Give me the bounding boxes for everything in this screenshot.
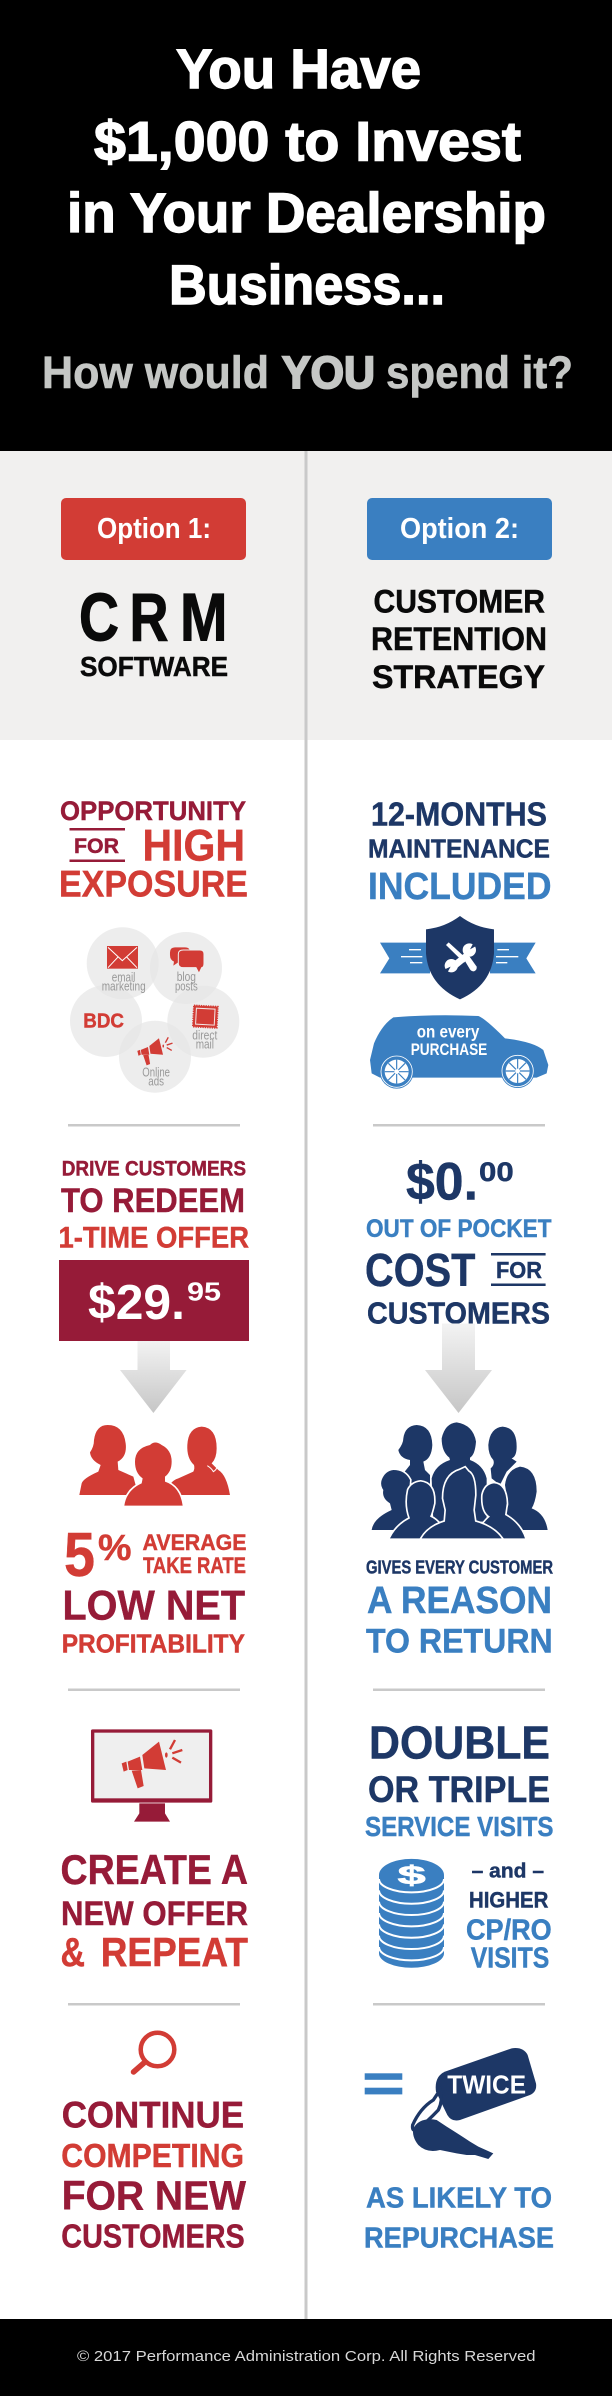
heading: continue competing for new customers: FOR NEW [62, 2173, 246, 2219]
CRM software title: R [130, 580, 168, 656]
heading: double or triple service visits [365, 1716, 554, 1842]
heading: opportunity for high exposure [59, 796, 248, 905]
heading: zero dollars out of pocket: OUT OF POCKET [366, 1215, 552, 1243]
label: on every purchase: PURCHASE [411, 1040, 487, 1059]
heading: gives every customer a reason to return: GIVES EVERY CUSTOMER [366, 1558, 553, 1578]
heading: create a new offer and repeat: & [60, 1929, 85, 1975]
heading: as likely to repurchase: AS LIKELY TO [366, 2182, 552, 2214]
icon: three customers [79, 1425, 230, 1506]
heading: drive customers to redeem: DRIVE CUSTOMERS [62, 1158, 246, 1180]
heading: zero dollars out of pocket [365, 1152, 552, 1330]
heading: double or triple service visits: DOUBLE [369, 1716, 550, 1768]
panel: option 1 exposure [59, 796, 248, 1093]
label: direct mail: direct [192, 1028, 218, 1042]
price box: 95 [187, 1276, 221, 1306]
label: online ads: ads [148, 1075, 164, 1089]
CRM software title: C [79, 580, 119, 656]
CRM software title: M [180, 580, 228, 656]
stat: 5 percent average take rate [64, 1521, 246, 1590]
center column divider [304, 451, 308, 2319]
divider row 3 [68, 2003, 545, 2006]
marketing channel circles [70, 927, 239, 1093]
heading: opportunity for high exposure: FOR [74, 835, 119, 858]
label: direct mail: mail [196, 1038, 214, 1052]
icon: speech bubbles [170, 947, 204, 973]
heading: as likely to repurchase: REPURCHASE [364, 2223, 554, 2255]
label: direct mail [192, 1028, 218, 1052]
heading: zero dollars out of pocket: COST [365, 1244, 475, 1296]
text: and higher CP/RO visits: CP/RO [466, 1914, 552, 1946]
label: email marketing [102, 971, 146, 994]
stat: 5 percent average take rate: 5 [64, 1521, 95, 1590]
divider row 2 [68, 1688, 545, 1691]
subtitle: How would [42, 347, 269, 398]
panel: option 2 repurchase [364, 2048, 554, 2255]
subtitle: spend it? [386, 347, 573, 398]
title [67, 37, 546, 316]
arrow: down [120, 1341, 187, 1413]
heading: low net profitability [62, 1581, 245, 1659]
stat: 5 percent average take rate: AVERAGE [142, 1530, 246, 1555]
label: twice: TWICE [447, 2071, 526, 2099]
label: blog posts: blog [177, 970, 196, 984]
heading: create a new offer and repeat: REPEAT [101, 1929, 248, 1975]
heading: gives every customer a reason to return: A REASON [367, 1580, 552, 1622]
heading: low net profitability: LOW NET [62, 1581, 245, 1628]
heading: create a new offer and repeat [60, 1846, 248, 1975]
label: online ads: Online [142, 1066, 170, 1080]
heading: drive customers to redeem [58, 1158, 249, 1255]
heading: opportunity for high exposure: HIGH [142, 822, 245, 871]
panel: option 1 header [61, 498, 246, 682]
icon: shield with tools [380, 916, 536, 999]
heading: create a new offer and repeat: NEW OFFER [61, 1895, 248, 1933]
heading: 12-months maintenance included: INCLUDED [368, 866, 552, 908]
heading: opportunity for high exposure: EXPOSURE [59, 864, 248, 905]
icon: magnifying glass [134, 2033, 174, 2072]
label: blog posts [175, 970, 198, 994]
text: and higher CP/RO visits: VISITS [471, 1942, 549, 1974]
heading: as likely to repurchase [364, 2182, 554, 2255]
panel: option 1 repeat [60, 1729, 248, 1975]
heading: continue competing for new customers: CONTINUE [62, 2094, 244, 2136]
option header band [0, 451, 612, 740]
panel: option 2 service visits [365, 1716, 554, 1974]
heading: double or triple service visits: SERVICE VISITS [365, 1811, 554, 1842]
icon: coin stack [379, 1859, 444, 1968]
customer retention strategy title: STRATEGY [372, 659, 545, 695]
panel: option 2 maintenance [368, 796, 552, 1089]
customer retention strategy title: CUSTOMER [374, 584, 545, 620]
heading: create a new offer and repeat: CREATE A [60, 1846, 248, 1893]
heading: opportunity for high exposure: OPPORTUNITY [60, 796, 246, 826]
icon: crowd of customers [372, 1422, 548, 1538]
subtitle: YOU [282, 347, 375, 398]
heading: zero dollars out of pocket: $0. [406, 1152, 478, 1212]
stat: 5 percent average take rate: TAKE RATE [143, 1553, 246, 1578]
heading: gives every customer a reason to return: TO RETURN [366, 1623, 553, 1661]
label: on every purchase [411, 1021, 487, 1059]
heading: continue competing for new customers: CUSTOMERS [61, 2218, 245, 2255]
footer [0, 2319, 612, 2396]
heading: continue competing for new customers: COMPETING [61, 2137, 244, 2174]
heading: drive customers to redeem: TO REDEEM [61, 1182, 245, 1220]
option 2 badge: Option 2: [400, 513, 519, 545]
heading: continue competing for new customers [61, 2094, 246, 2255]
icon: equals sign [365, 2073, 402, 2094]
header banner [0, 0, 612, 451]
icon: envelope [107, 946, 138, 969]
text: and higher CP/RO visits: – and – [472, 1859, 544, 1882]
heading: 12-months maintenance included: 12-MONTHS [371, 796, 547, 833]
stat: 5 percent average take rate: % [98, 1527, 132, 1568]
price box: $29. [88, 1276, 185, 1330]
heading: low net profitability: PROFITABILITY [62, 1631, 245, 1659]
CRM software title: SOFTWARE [80, 651, 228, 682]
heading: 12-months maintenance included [368, 796, 552, 908]
heading: gives every customer a reason to return [366, 1558, 553, 1661]
icon: megaphone [137, 1037, 173, 1065]
label: email marketing: marketing [102, 980, 146, 994]
title: You Have [176, 37, 421, 100]
icon: key fob [412, 2048, 536, 2159]
heading: zero dollars out of pocket: FOR [496, 1257, 542, 1283]
label: BDC: BDC [83, 1010, 124, 1032]
label: email marketing: email [112, 971, 135, 985]
panel: option 1 competing [61, 2033, 246, 2255]
icon: car [370, 1015, 548, 1089]
title: Business... [169, 253, 445, 316]
icon: coin stack: $ [398, 1860, 427, 1890]
icon: monitor with megaphone [91, 1729, 212, 1822]
label: online ads [142, 1066, 170, 1089]
option 2 badge [367, 498, 552, 560]
panel: option 1 offer [58, 1158, 249, 1659]
text: and higher CP/RO visits: HIGHER [469, 1887, 548, 1912]
icon: stamp [193, 1005, 218, 1028]
panel: option 2 no cost [365, 1152, 553, 1661]
heading: drive customers to redeem: 1-TIME OFFER [58, 1222, 249, 1255]
heading: zero dollars out of pocket: 00 [479, 1157, 514, 1187]
title: $1,000 to Invest [94, 110, 521, 172]
divider row 1 [68, 1124, 545, 1126]
customer retention strategy title: RETENTION [371, 621, 547, 657]
option 1 badge [61, 498, 246, 560]
price box [59, 1260, 249, 1341]
title: in Your Dealership [67, 181, 546, 244]
arrow: down [425, 1324, 492, 1413]
footer: © 2017 Performance Administration Corp. All Rights Reserved [77, 2348, 536, 2365]
label: on every purchase: on every [417, 1021, 480, 1041]
heading: zero dollars out of pocket: CUSTOMERS [367, 1296, 550, 1330]
heading: double or triple service visits: OR TRIPLE [368, 1769, 550, 1810]
subtitle [42, 347, 573, 398]
customer retention strategy title [371, 584, 547, 695]
CRM software title [79, 580, 228, 682]
text: and higher CP/RO visits [466, 1859, 552, 1974]
label: blog posts: posts [175, 980, 198, 994]
option 1 badge: Option 1: [97, 513, 211, 545]
heading: 12-months maintenance included: MAINTENANCE [368, 836, 550, 864]
panel: option 2 header [367, 498, 552, 695]
